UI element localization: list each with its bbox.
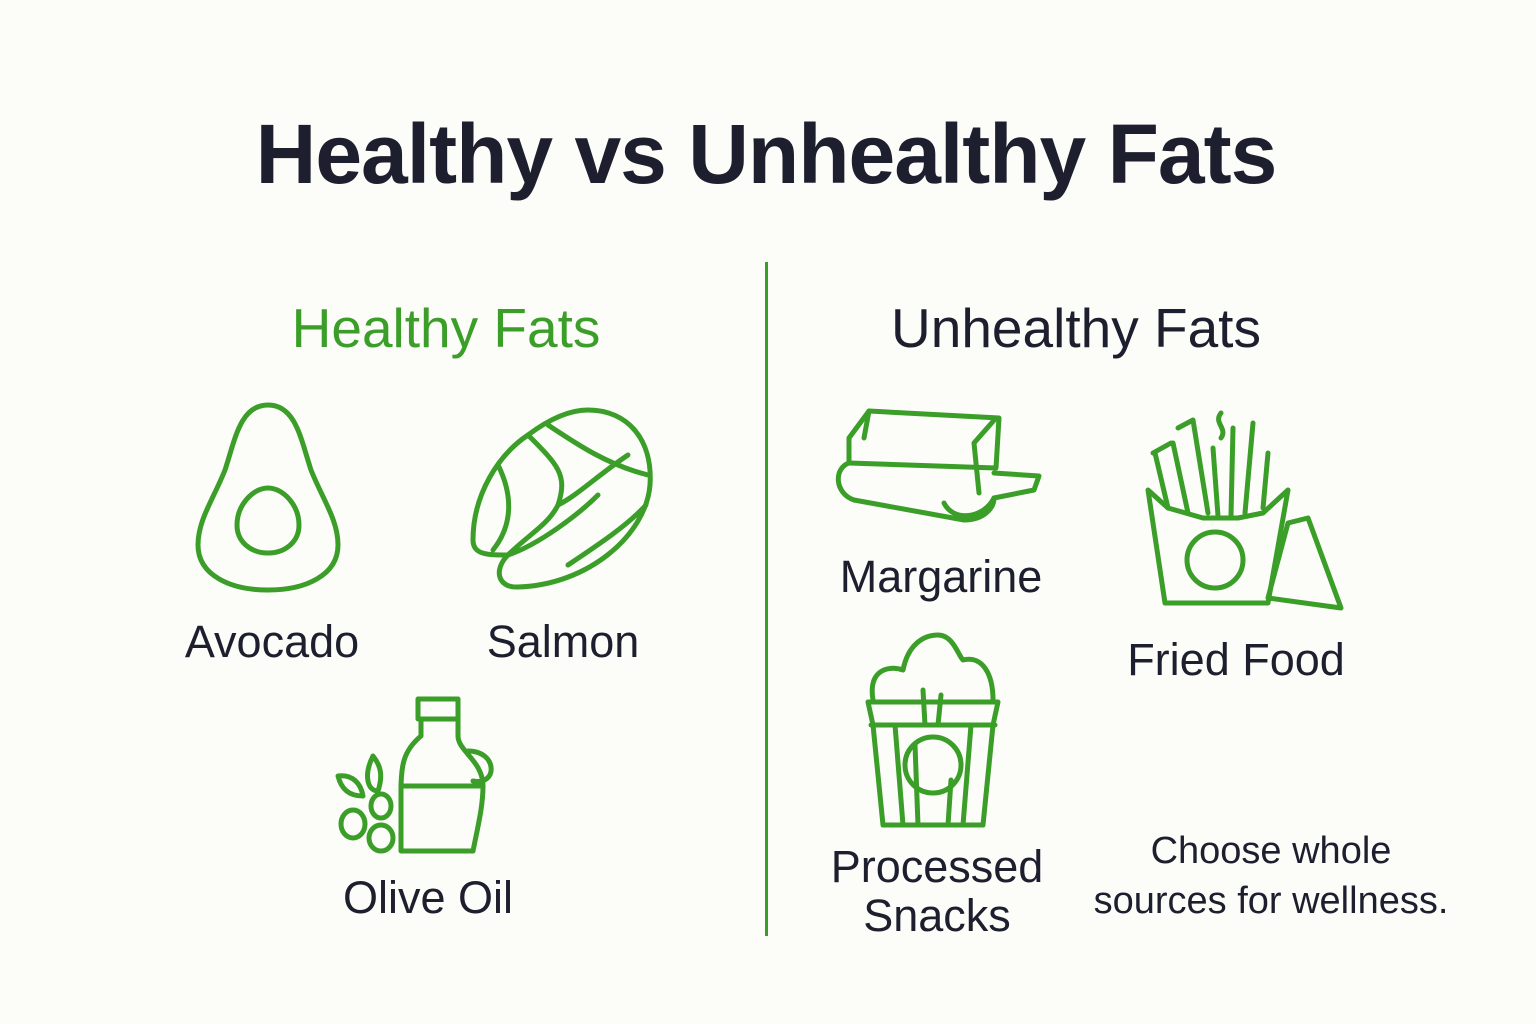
text: tagline: sources for wellness. bbox=[1094, 880, 1448, 922]
label: margarine: Margarine bbox=[840, 551, 1042, 602]
label: processed snacks: Snacks bbox=[863, 890, 1011, 941]
label: avocado: Avocado bbox=[185, 616, 359, 667]
icon: avocado bbox=[196, 402, 340, 592]
icon: salmon bbox=[470, 408, 653, 590]
label: salmon: Salmon bbox=[487, 616, 639, 667]
icon: processed snacks bbox=[866, 632, 1000, 828]
icon: margarine bbox=[836, 408, 1042, 522]
label: fried food: Fried Food bbox=[1127, 634, 1345, 685]
icon: fried food bbox=[1146, 410, 1344, 610]
text: tagline: Choose whole bbox=[1151, 830, 1391, 872]
heading: unhealthy fats: Unhealthy Fats bbox=[891, 297, 1261, 359]
label: processed snacks bbox=[831, 841, 1043, 941]
divider bbox=[765, 262, 768, 936]
label: olive oil: Olive Oil bbox=[343, 872, 513, 923]
text: tagline bbox=[1094, 830, 1448, 922]
icon: olive oil bbox=[336, 696, 494, 854]
label: processed snacks: Processed bbox=[831, 841, 1043, 892]
title: Healthy vs Unhealthy Fats bbox=[256, 107, 1276, 201]
heading: healthy fats: Healthy Fats bbox=[292, 297, 600, 359]
